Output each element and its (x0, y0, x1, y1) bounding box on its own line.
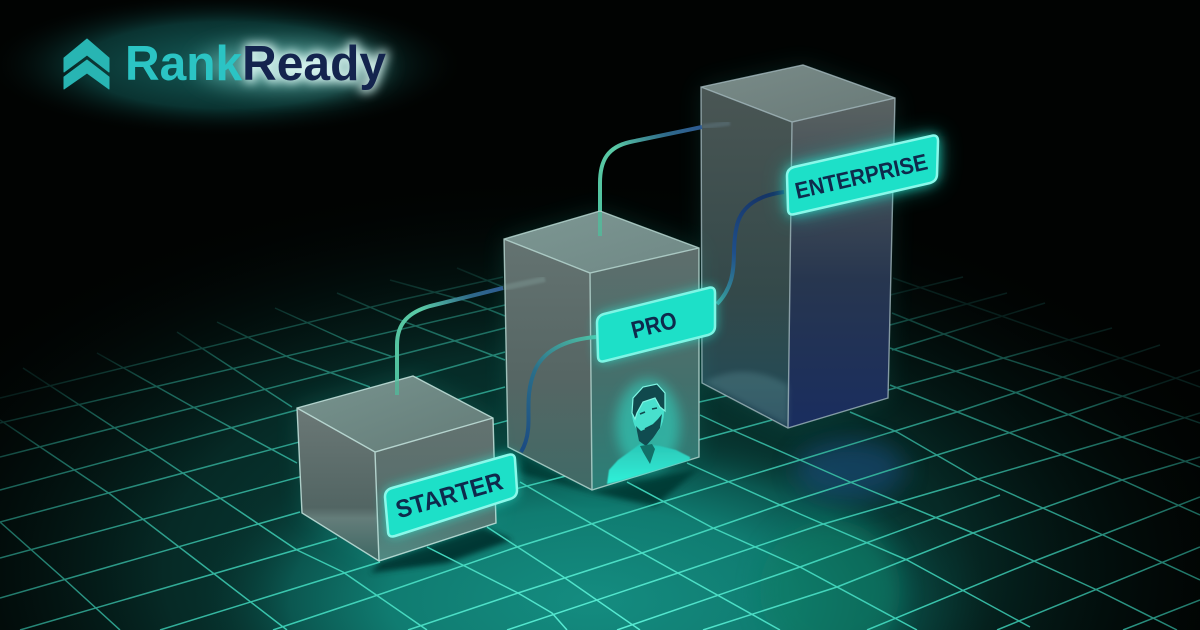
box: enterprise (701, 65, 895, 428)
hair (632, 384, 665, 419)
box: starter (297, 376, 496, 561)
pro text: PRO (629, 307, 680, 344)
enterprise text: ENTERPRISE (793, 149, 930, 204)
enterprise floor reflection (704, 372, 788, 426)
connector stub on pro top (598, 212, 602, 236)
shoulders (607, 444, 690, 484)
connector stub on starter top (395, 378, 399, 395)
logo: RankReady (0, 0, 480, 150)
starter left face (297, 408, 379, 561)
connector: faint pass through enterprise (702, 123, 730, 127)
pro right face (590, 248, 699, 490)
perspective grid floor (0, 268, 1200, 630)
logo icon: double chevron (64, 39, 109, 89)
connector: enterprise label to pro (717, 192, 784, 304)
portrait hologram (607, 379, 690, 484)
pro top face (504, 211, 699, 273)
eyes and smile (640, 408, 657, 429)
beard (636, 414, 662, 446)
label: pro (597, 288, 715, 361)
enterprise top face (701, 65, 895, 122)
face (632, 387, 664, 437)
enterprise edges (701, 65, 895, 428)
connector: starter to pro (397, 288, 503, 393)
enterprise right face (788, 98, 895, 428)
logo wordmark: RankReady (125, 37, 386, 91)
collar shadow (640, 444, 655, 464)
connector: pro label to starter (521, 337, 596, 452)
enterprise left face (701, 87, 792, 428)
starter edges (297, 376, 496, 561)
floor glow (0, 170, 1200, 630)
connector: faint pass through pro (503, 279, 545, 288)
pro left face (504, 239, 592, 490)
logo: RankReady: Ready (244, 37, 386, 91)
box: pro (504, 211, 699, 490)
label: enterprise (787, 136, 938, 214)
starter right face (375, 418, 496, 561)
starter top face (297, 376, 493, 452)
connector: pro to enterprise (600, 127, 702, 235)
label: starter (385, 455, 517, 536)
pro edges (504, 211, 699, 490)
starter text: STARTER (393, 467, 506, 524)
